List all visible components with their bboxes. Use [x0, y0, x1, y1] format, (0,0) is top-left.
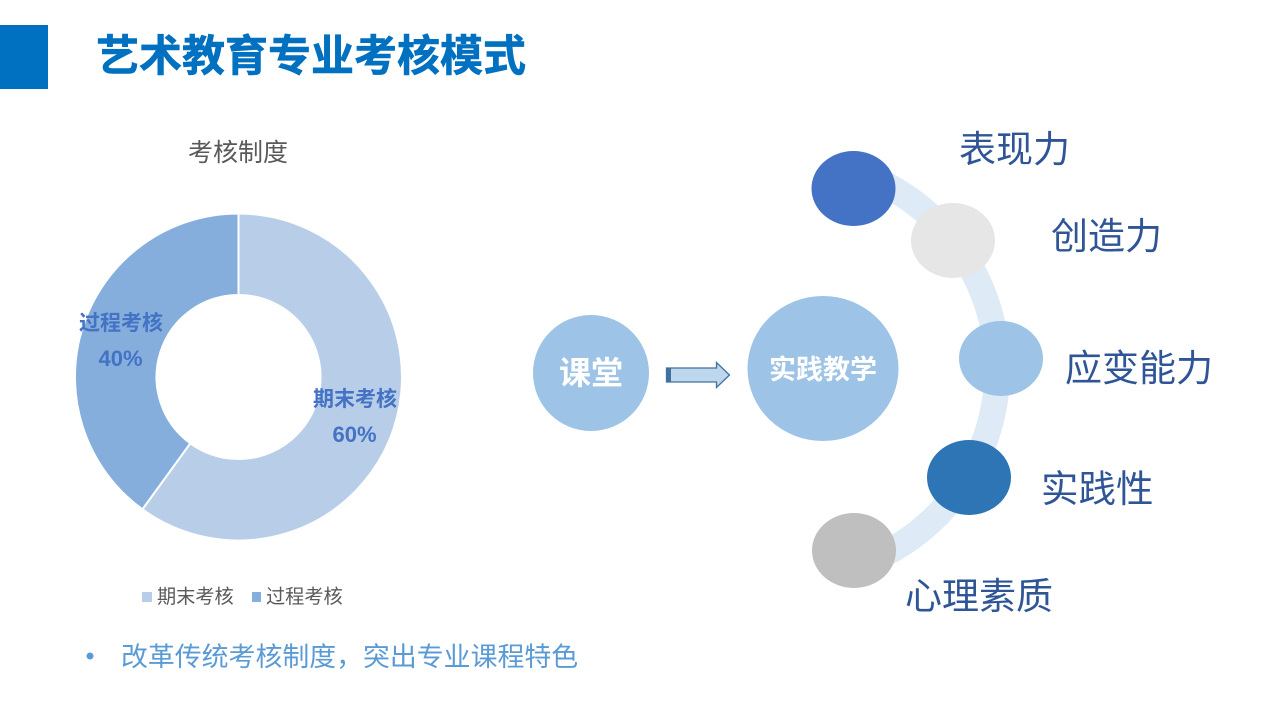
node: psychological quality: 心理素质 [905, 576, 1053, 617]
node: practicality [927, 440, 1154, 515]
data label: final exam: 期末考核 [313, 387, 397, 411]
bullet note: 改革传统考核制度，突出专业课程特色 [121, 642, 578, 672]
node: practicality: 实践性 [1041, 468, 1154, 510]
node: adaptability [959, 321, 1213, 396]
legend [142, 586, 343, 608]
node: expressiveness: 表现力 [959, 129, 1070, 170]
circle: practice teaching: 实践教学 [769, 355, 877, 385]
donut chart: assessment system [75, 139, 402, 608]
node: adaptability: 应变能力 [1065, 348, 1213, 389]
arrow [666, 362, 730, 388]
chart title: 考核制度 [188, 139, 288, 167]
node: creativity [911, 203, 1162, 278]
data label: final exam: 60% [332, 422, 377, 447]
data label: final exam [313, 387, 397, 447]
node: psychological quality [812, 513, 1053, 617]
header accent block [0, 25, 48, 89]
circle: classroom: 课堂 [559, 355, 623, 391]
data label: process assessment: 40% [98, 346, 143, 371]
segment: final exam 60% [142, 214, 402, 540]
legend: 期末考核 [157, 586, 234, 608]
node: expressiveness [812, 129, 1070, 226]
circle: practice teaching [748, 296, 898, 441]
curved connector band [874, 179, 997, 559]
circle: classroom [533, 315, 649, 431]
segment: process assessment 40% [75, 213, 238, 509]
node: creativity: 创造力 [1051, 216, 1162, 257]
title: 艺术教育专业考核模式 [96, 33, 526, 81]
legend: 过程考核 [266, 586, 343, 608]
data label: process assessment [79, 311, 163, 371]
data label: process assessment: 过程考核 [79, 311, 163, 335]
